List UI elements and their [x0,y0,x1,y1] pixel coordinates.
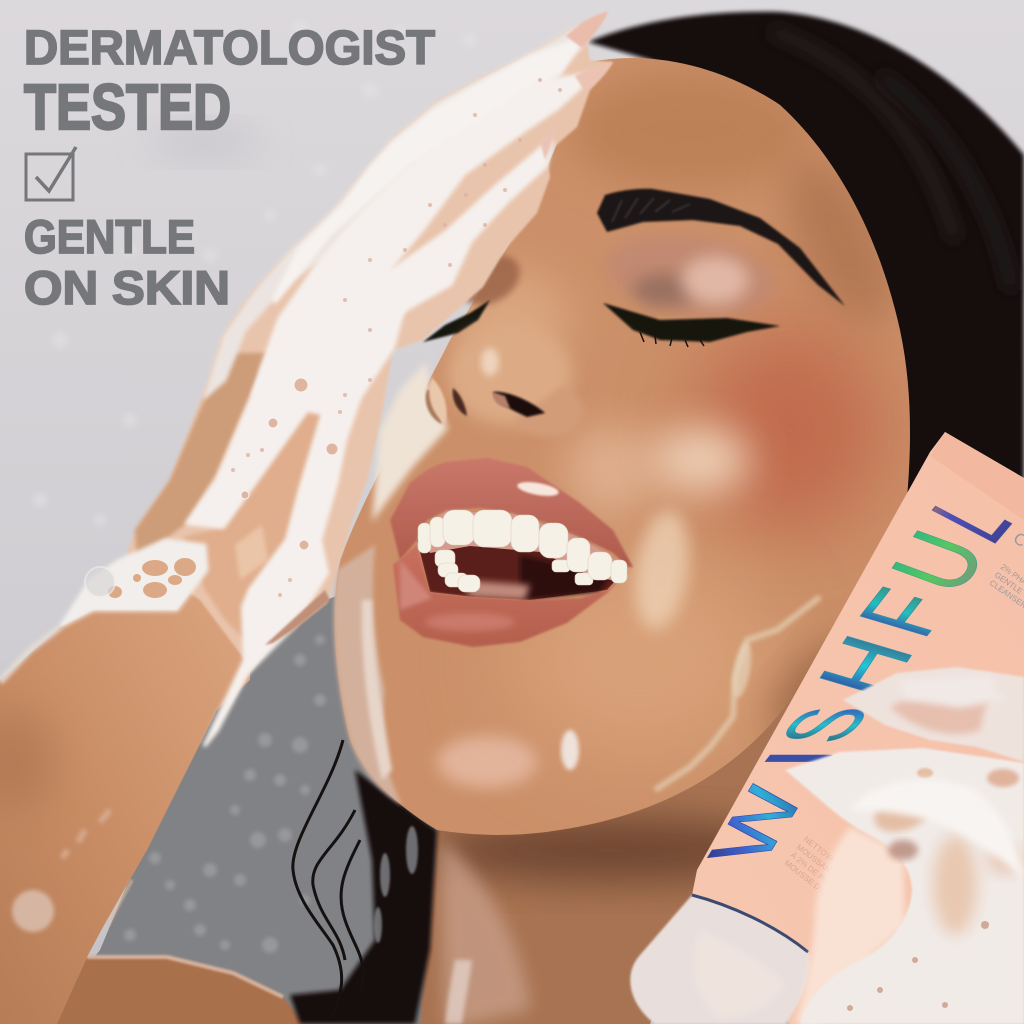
main foam mass [785,748,1024,1024]
face [334,58,914,835]
French product copy: NETTOYANT DOUX [802,834,865,887]
finger 3 foam [300,142,550,400]
small product copy: GENTLE [993,570,1024,596]
headline: tested: TESTED [24,71,231,143]
foam bubbles [241,378,338,550]
foam beside nose [372,362,448,522]
foam on jaw [334,545,402,805]
upper lip [390,458,633,567]
tube brand name: W [691,780,825,869]
mouth interior [417,510,628,600]
icon: check box [26,147,76,200]
closed eye lashes [603,303,780,347]
foamy hand holding tube [785,667,1024,1024]
tube brand name: U [867,518,1010,606]
dark lower background [40,590,450,1024]
back of hand foam [187,270,403,745]
fingertips [566,12,608,48]
teeth [418,510,627,592]
French product copy: MOUSSE D'ALGUES [783,858,849,913]
lower hand skin patch [183,410,323,640]
arm [0,570,250,1024]
upper finger foam [843,667,1024,762]
small product copy [988,529,1024,611]
nose [426,325,583,437]
French product copy: À 2% DE PHA ET [789,850,844,897]
finger 2 foam [255,75,592,395]
lower lip [393,545,632,647]
foam over tube [795,827,905,1024]
tube cap [630,895,810,1024]
product tube [630,432,1024,1024]
foam streak on cheek [655,597,820,790]
neck and shoulder [57,680,830,1024]
French product copy: MOUSSANT CORPS [795,842,860,896]
headline: dermatologist: DERMATOLOGIST [24,22,435,75]
tube brand name: S [756,706,893,744]
French product copy [783,834,865,913]
eye makeup [451,226,779,324]
wrist bubble cluster [0,540,207,682]
eyebrow [597,189,845,306]
tube brand name [691,479,1024,869]
tube brand name: F [835,578,972,647]
mouth [390,458,633,647]
wet hair strands [290,740,437,1024]
tiny bubbles [231,78,562,597]
shadow on forearm fold [265,590,330,645]
tube brand name: H [796,624,935,709]
finger 1 foam [275,38,585,300]
left eye lashes [423,300,490,342]
subhead: on skin: ON SKIN [24,261,230,314]
gum line [420,510,628,582]
face shading [437,70,914,788]
hand skin base [127,12,613,750]
hand covered in foam [0,12,613,750]
outer foam film [205,25,580,397]
tube brand name: I [741,749,856,768]
hair [588,12,1024,540]
subhead: gentle: GENTLE [24,210,195,263]
skin showing on left of hand [135,353,270,560]
tube body [692,432,1024,1024]
foam patches [869,785,937,839]
tube crimp [930,432,1024,520]
